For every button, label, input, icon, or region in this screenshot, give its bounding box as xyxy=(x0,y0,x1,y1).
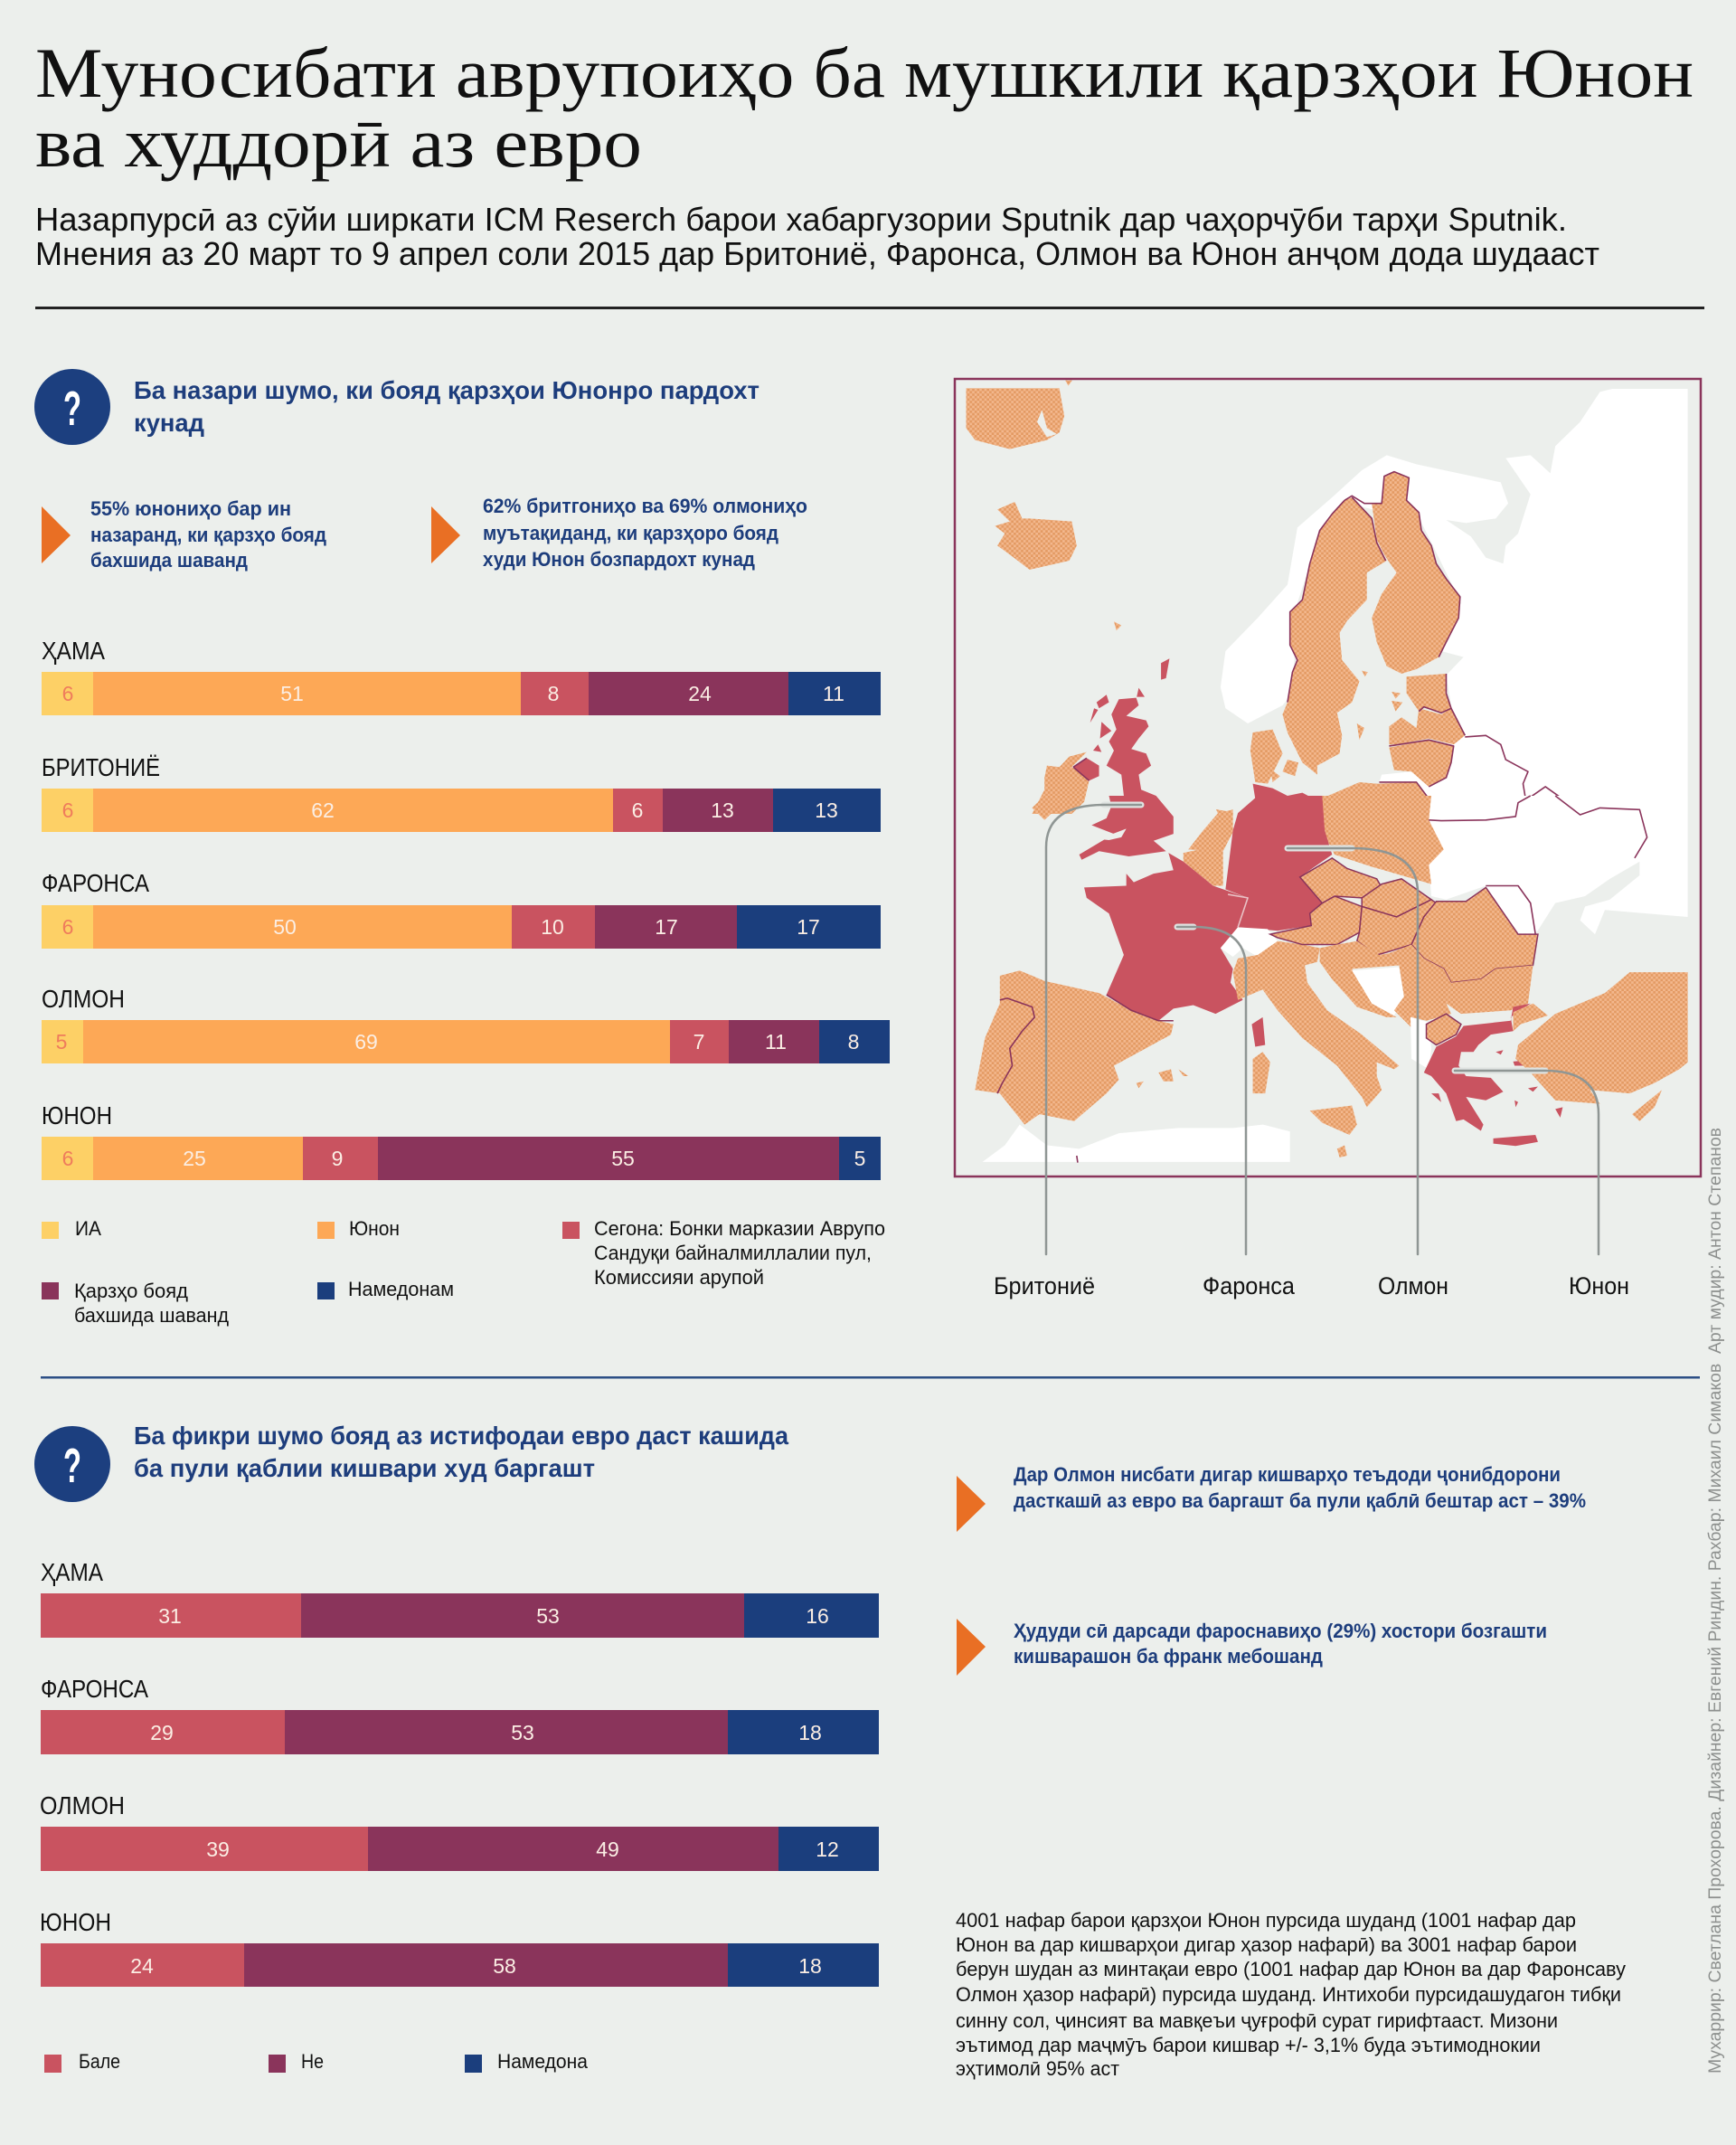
map of Europe xyxy=(955,379,1701,1299)
callout: Germany 39% xyxy=(1014,1463,1586,1512)
bar row: Ҳама: 6 xyxy=(62,682,73,705)
bar chart: who should pay xyxy=(42,637,890,1180)
bar row 2: Олмон: 39 xyxy=(206,1838,230,1861)
heading: question 1: кунад xyxy=(134,409,204,437)
callout: France 29% xyxy=(1014,1620,1547,1668)
bar row: Ҳама: 8 xyxy=(548,682,559,705)
vertical credits: Мухаррир: Светлана Прохорова. Дизайнер: Евгений Риндин. Рахбар: Михаил Симаков Арт мудир: Антон Степанов xyxy=(1706,1128,1725,2074)
callout: 55% xyxy=(90,497,326,572)
subtitle xyxy=(35,201,1599,272)
bar row: Юнон xyxy=(42,1101,881,1180)
methodology note: 4001 нафар барои қарзҳои Юнон пурсида шуданд (1001 нафар дар xyxy=(956,1909,1576,1932)
bar row: Олмон: 7 xyxy=(693,1030,704,1054)
methodology note: синну сол, ҷинсият ва мавқеъи ҷуғрофӣ сурат гирифтааст. Мизони xyxy=(956,2009,1558,2032)
bar row: Фаронса: 17 xyxy=(797,915,820,939)
bar row 2: Юнон xyxy=(40,1908,879,1987)
map lower part: central and southern Europe xyxy=(975,796,1688,1163)
bar row: Ҳама xyxy=(42,637,881,715)
map frame xyxy=(955,379,1701,1176)
legend: question 1 xyxy=(42,1217,885,1327)
panel: question 1 xyxy=(34,369,807,572)
bar row 2: Юнон: 18 xyxy=(798,1954,822,1978)
icon: arrow 1 xyxy=(42,506,71,563)
bar row: Бритониё: 13 xyxy=(815,798,838,822)
heading: question 2: ба пули қаблии кишвари худ баргашт xyxy=(134,1454,595,1482)
bar row: Фаронса: 6 xyxy=(62,915,73,939)
bar row: Юнон: 9 xyxy=(332,1147,343,1170)
bar row: Ҳама: 24 xyxy=(688,682,712,705)
panel: question 2 xyxy=(34,1422,788,1502)
bar row: Фаронса: 10 xyxy=(541,915,564,939)
bar chart: leave the euro xyxy=(40,1558,879,1987)
legend: question 2: Бале xyxy=(79,2050,120,2073)
bar row: Юнон: ЮНОН xyxy=(42,1101,112,1129)
callout: France 29%: Ҳудуди сӣ дарсади фароснавиҳо (29%) хостори бозгашти xyxy=(1014,1620,1547,1642)
legend: question 1: Намедонам xyxy=(348,1278,454,1300)
bar row 2: Фаронса: 29 xyxy=(150,1721,174,1744)
icon: question mark 2: ? xyxy=(63,1439,81,1493)
methodology note: Юнон ва дар кишварҳои дигар ҳазор нафарӣ) ва 3001 нафар барои xyxy=(956,1933,1577,1956)
bar row: Бритониё: 6 xyxy=(62,798,73,822)
callout: 55%: бахшида шаванд xyxy=(90,549,248,572)
legend: question 1: Сегона: Бонки марказии Аврупо xyxy=(594,1217,885,1240)
map labels: Бритониё xyxy=(994,1272,1095,1299)
bar row 2: Ҳама: 16 xyxy=(806,1604,829,1628)
methodology note: эътимод дар маҷмӯъ барои кишвар +/- 3,1% буда эътимоднокии xyxy=(956,2034,1541,2056)
bar row: Ҳама: ҲАМА xyxy=(42,637,105,665)
bar row 2: Фаронса xyxy=(41,1675,879,1754)
legend: question 1: ИА xyxy=(75,1217,101,1240)
callout: 62% and 69%: 62% бритгониҳо ва 69% олмониҳо xyxy=(483,495,807,517)
bar row 2: Олмон: 12 xyxy=(816,1838,839,1861)
callout: 62% and 69%: муътақиданд, ки қарзҳоро бояд xyxy=(483,522,778,544)
bar row 2: Фаронса: 18 xyxy=(798,1721,822,1744)
title xyxy=(35,33,1694,182)
bar row: Бритониё: 6 xyxy=(632,798,643,822)
icon: question mark 1 xyxy=(34,369,110,445)
icon: arrow 3 xyxy=(957,1476,986,1532)
methodology note: берун шудан аз минтақаи евро (1001 нафар дар Юнон ва дар Фаронсаву xyxy=(956,1958,1626,1980)
map labels: Фаронса xyxy=(1203,1272,1296,1299)
subtitle: Мнения аз 20 март то 9 апрел соли 2015 дар Бритониё, Фаронса, Олмон ва Юнон анҷом дода шудааст xyxy=(35,235,1599,272)
bar row: Олмон xyxy=(42,985,890,1063)
methodology note: Олмон ҳазор нафарӣ) пурсида шуданд. Интихоби пурсидашудагон тибқи xyxy=(956,1983,1621,2006)
heading: question 2 xyxy=(134,1422,788,1482)
icon: arrow 4 xyxy=(957,1619,986,1676)
legend: question 2: Намедона xyxy=(497,2050,589,2073)
bar row: Олмон: 11 xyxy=(765,1030,787,1054)
bar row 2: Фаронса: 53 xyxy=(511,1721,534,1744)
bar row: Юнон: 25 xyxy=(183,1147,206,1170)
bar row: Фаронса: 17 xyxy=(655,915,678,939)
callout: France 29%: кишварашон ба франк мебошанд xyxy=(1014,1645,1323,1668)
bar row: Юнон: 6 xyxy=(62,1147,73,1170)
bar row 2: Ҳама xyxy=(41,1558,879,1638)
connector: Бритониё xyxy=(1046,805,1141,1254)
bar row: Ҳама: 51 xyxy=(280,682,304,705)
bar row: Бритониё: 62 xyxy=(311,798,335,822)
bar row 2: Юнон: 58 xyxy=(493,1954,516,1978)
bar row: Фаронса: ФАРОНСА xyxy=(42,869,149,897)
callout: 55%: 55% юнониҳо бар ин xyxy=(90,497,291,520)
legend: question 1: Сандуқи байналмиллалии пул, xyxy=(594,1242,872,1264)
callout: 62% and 69% xyxy=(483,495,807,571)
icon: arrow 2 xyxy=(431,506,460,563)
bar row: Юнон: 55 xyxy=(611,1147,635,1170)
bar row: Фаронса xyxy=(42,869,881,949)
connector: Фаронса xyxy=(1177,927,1246,1254)
bar row 2: Ҳама: 31 xyxy=(158,1604,182,1628)
callout: Germany 39%: Дар Олмон нисбати дигар кишварҳо теъдоди ҷонибдорони xyxy=(1014,1463,1561,1486)
heading: question 1 xyxy=(134,376,760,437)
map labels: Юнон xyxy=(1569,1272,1629,1299)
legend: question 2: Не xyxy=(301,2050,324,2073)
connector: Юнон xyxy=(1455,1071,1599,1254)
heading: question 1: Ба назари шумо, ки бояд қарзҳои Юнонро пардохт xyxy=(134,376,760,404)
bar row 2: Юнон: ЮНОН xyxy=(40,1908,111,1936)
bar row 2: Ҳама: 53 xyxy=(536,1604,560,1628)
legend: question 1: бахшида шаванд xyxy=(74,1304,229,1327)
bar row: Олмон: 5 xyxy=(56,1030,67,1054)
bar row: Олмон: ОЛМОН xyxy=(42,985,125,1013)
bar row: Олмон: 8 xyxy=(848,1030,859,1054)
connector: Олмон xyxy=(1288,848,1418,1254)
bar row 2: Юнон: 24 xyxy=(130,1954,154,1978)
heading: question 2: Ба фикри шумо бояд аз истифодаи евро даст кашида xyxy=(134,1422,788,1450)
methodology note: эҳтимолӣ 95% аст xyxy=(956,2057,1119,2080)
legend: question 1: Юнон xyxy=(349,1217,400,1240)
icon: question mark 1: ? xyxy=(63,382,81,436)
bar row: Юнон: 5 xyxy=(854,1147,865,1170)
map upper part: northern Europe xyxy=(967,381,1688,814)
legend: question 1: Қарзҳо бояд xyxy=(74,1280,188,1302)
callout: 55%: назаранд, ки қарзҳо бояд xyxy=(90,524,326,546)
bar row: Бритониё: 13 xyxy=(711,798,734,822)
title: Муносибати аврупоиҳо ба мушкили қарзҳои Юнон xyxy=(35,33,1694,112)
icon: question mark 2 xyxy=(34,1426,110,1502)
legend: question 2 xyxy=(44,2050,589,2073)
subtitle: Назарпурсӣ аз сӯйи ширкати ICM Reserch барои хабаргузории Sputnik дар чаҳорчӯби тарҳи Sputnik. xyxy=(35,201,1567,238)
callout: 62% and 69%: худи Юнон бозпардохт кунад xyxy=(483,548,755,571)
map labels xyxy=(994,1272,1629,1299)
bar row 2: Ҳама: ҲАМА xyxy=(41,1558,103,1586)
bar row 2: Олмон: ОЛМОН xyxy=(40,1791,125,1819)
bar row: Фаронса: 50 xyxy=(273,915,297,939)
methodology note xyxy=(956,1909,1626,2080)
callout: Germany 39%: дасткашӣ аз евро ва баргашт ба пули қаблӣ бештар аст – 39% xyxy=(1014,1489,1586,1512)
bar row: Олмон: 69 xyxy=(354,1030,378,1054)
bar row 2: Олмон: 49 xyxy=(596,1838,619,1861)
bar row: Ҳама: 11 xyxy=(823,682,844,705)
bar row: Бритониё: БРИТОНИЁ xyxy=(42,753,160,781)
title: ва худдорӣ аз евро xyxy=(35,103,642,182)
bar row 2: Олмон xyxy=(40,1791,879,1871)
bar row 2: Фаронса: ФАРОНСА xyxy=(41,1675,148,1703)
map labels: Олмон xyxy=(1378,1272,1448,1299)
bar row: Бритониё xyxy=(42,753,881,832)
legend: question 1: Комиссияи арупой xyxy=(594,1266,764,1289)
